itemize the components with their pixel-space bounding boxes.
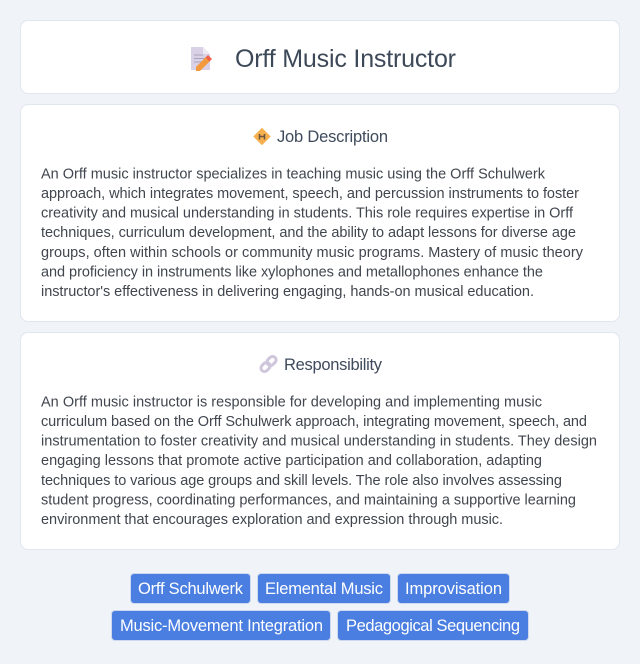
responsibility text: techniques to various age groups and skill levels. The role also involves assessing <box>41 473 562 489</box>
job description text <box>41 166 584 300</box>
job description text: and proficiency in instruments like xylophones and metallophones enhance the <box>41 264 543 280</box>
tag label: Orff Schulwerk: Orff Schulwerk <box>138 580 244 598</box>
responsibility text: engaging lessons that promote active participation and collaboration, adapting <box>41 453 542 469</box>
job description text: approach, which integrates movement, speech, and percussion instruments to foster <box>41 186 579 202</box>
responsibility text: student progress, coordinating performances, and maintaining a supportive learning <box>41 492 576 508</box>
responsibility text <box>41 394 597 528</box>
job description text: techniques, curriculum development, and the ability to adapt lessons for diverse age <box>41 225 576 241</box>
tag background: Pedagogical Sequencing <box>337 610 529 641</box>
job description text: creativity and musical understanding in students. This role requires expertise in Orff <box>41 206 574 222</box>
responsibility text: curriculum based on the Orff Schulwerk approach, integrating movement, speech, and <box>41 414 587 430</box>
title: Orff Music Instructor <box>235 45 456 73</box>
responsibility text: environment that encourages exploration and expression through music. <box>41 512 503 528</box>
job description text: An Orff music instructor specializes in teaching music using the Orff Schulwerk <box>41 166 546 182</box>
panel: job description <box>20 104 620 322</box>
responsibility text: instrumentation to foster creativity and musical understanding in students. They design <box>41 434 597 450</box>
tag label: Music-Movement Integration: Music-Movement Integration <box>120 617 323 635</box>
panel: responsibility <box>20 332 620 550</box>
job description text: instructor's effectiveness in delivering engaging, hands-on musical education. <box>41 284 534 300</box>
panel: header <box>20 20 620 94</box>
responsibility text: An Orff music instructor is responsible for developing and implementing music <box>41 394 542 410</box>
icon: document with pencil <box>191 47 212 71</box>
icon: chain link <box>259 355 278 373</box>
tag background: Music-Movement Integration <box>111 610 331 641</box>
heading: responsibility: Responsibility <box>284 356 383 374</box>
icon: orange diamond sign <box>254 128 270 144</box>
tag label: Improvisation: Improvisation <box>405 580 502 598</box>
tag label: Elemental Music: Elemental Music <box>265 580 383 598</box>
tag background: Elemental Music <box>257 573 391 604</box>
job description text: groups, often within schools or community music programs. Mastery of music theory <box>41 245 584 261</box>
tag background: Improvisation <box>397 573 510 604</box>
tag background: Orff Schulwerk <box>130 573 251 604</box>
heading: job description: Job Description <box>277 128 388 146</box>
tag label: Pedagogical Sequencing: Pedagogical Sequencing <box>346 617 520 635</box>
